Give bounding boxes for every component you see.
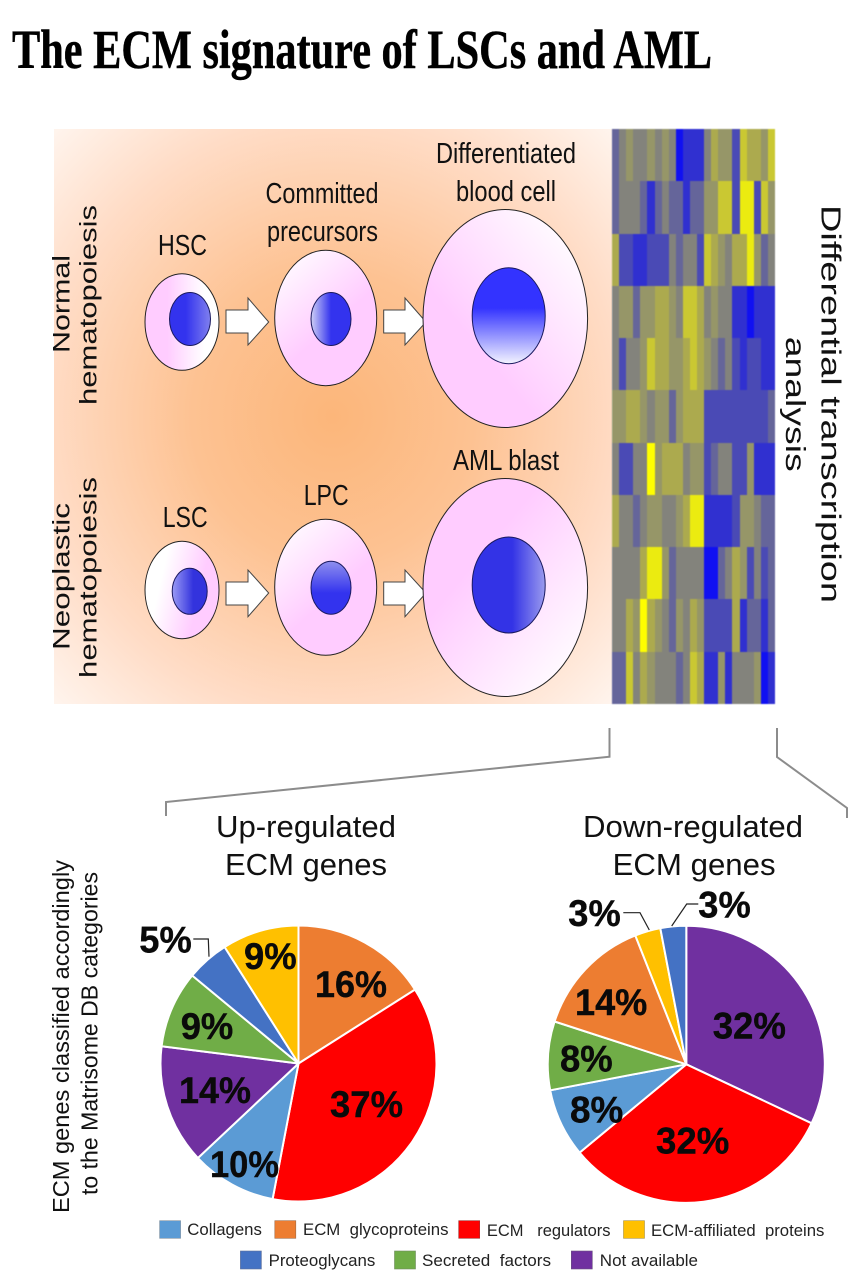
arrow: precursors to differentiated cell xyxy=(384,298,426,345)
label: LPC: LPC xyxy=(304,480,349,512)
cell: HSC xyxy=(145,274,219,370)
label: Differential transcription analysis xyxy=(780,205,847,603)
pie chart: down-regulated: 14% xyxy=(575,981,647,1023)
label: Committed precursors: precursors xyxy=(267,216,378,248)
pie chart: down-regulated: 8% xyxy=(570,1088,623,1130)
pie chart: up-regulated: 10% xyxy=(210,1143,279,1185)
pie chart: down-regulated: 8% xyxy=(560,1038,613,1080)
heading: Up-regulated ECM genes: ECM genes xyxy=(225,847,387,882)
label: Differential transcription analysis: analysis xyxy=(780,337,811,472)
label: Differentiated blood cell xyxy=(436,138,576,208)
connector: heatmap to down-regulated genes xyxy=(777,728,847,818)
label: Normal hematopoiesis xyxy=(48,205,103,405)
heatmap: differential transcription xyxy=(611,128,776,705)
label: Neoplastic hematopoiesis: hematopoiesis xyxy=(76,477,103,678)
legend: ECM regulators xyxy=(487,1222,610,1240)
arrow: LSC to LPC xyxy=(226,570,269,617)
pie chart: down-regulated: 32% xyxy=(713,1004,786,1046)
label: AML blast: AML blast xyxy=(453,445,559,477)
label: Committed precursors: Committed xyxy=(266,178,378,210)
legend: Secreted factors xyxy=(422,1252,551,1270)
heading: Up-regulated ECM genes: Up-regulated xyxy=(216,809,396,844)
label: Differential transcription analysis: Differential transcription xyxy=(816,205,847,603)
pie chart: up-regulated: 16% xyxy=(315,963,387,1005)
cell: AML blast xyxy=(423,478,588,696)
label: Normal hematopoiesis: Normal xyxy=(48,255,75,353)
pie chart: up-regulated: 9% xyxy=(181,1005,233,1047)
legend: ECM-affiliated proteins xyxy=(651,1222,824,1240)
connector: heatmap to up-regulated genes xyxy=(166,728,610,816)
pie chart: up-regulated: 37% xyxy=(330,1083,403,1125)
label: Committed precursors xyxy=(266,178,378,248)
legend: Collagens xyxy=(187,1221,262,1239)
heading: Up-regulated ECM genes xyxy=(216,809,396,882)
cell: LSC xyxy=(145,541,219,639)
label: Neoplastic hematopoiesis: Neoplastic xyxy=(48,503,75,650)
pie chart: up-regulated: 14% xyxy=(179,1069,251,1111)
label: Differentiated blood cell: blood cell xyxy=(456,176,556,208)
pie chart: up-regulated: 9% xyxy=(244,935,297,977)
pie chart: up-regulated: 5% xyxy=(139,919,192,961)
heading: Down-regulated ECM genes: Down-regulated xyxy=(583,809,803,844)
cell: LPC xyxy=(275,519,377,655)
label: Normal hematopoiesis: hematopoiesis xyxy=(76,205,103,405)
pie chart: down-regulated: 3% xyxy=(568,892,621,934)
arrow: LPC to AML blast xyxy=(384,570,426,617)
legend: Proteoglycans xyxy=(269,1252,375,1270)
label: HSC: HSC xyxy=(158,230,207,262)
label: ECM genes classification axis xyxy=(48,860,102,1213)
label: Neoplastic hematopoiesis xyxy=(48,477,103,678)
label: LSC: LSC xyxy=(163,502,208,534)
cell: differentiated blood cell xyxy=(423,210,588,428)
pie chart: down-regulated: 3% xyxy=(698,883,751,925)
heading: Down-regulated ECM genes xyxy=(583,809,803,882)
arrow: HSC to committed precursors xyxy=(226,298,269,345)
pie chart: down-regulated: 32% xyxy=(656,1119,729,1161)
label: ECM genes classification axis: to the Matrisome DB categories xyxy=(76,872,102,1195)
legend: Not available xyxy=(600,1252,698,1270)
cell: committed precursor xyxy=(275,250,377,386)
heading: Down-regulated ECM genes: ECM genes xyxy=(613,847,776,882)
label: Differentiated blood cell: Differentiated xyxy=(436,138,576,170)
pie chart: up-regulated xyxy=(139,919,436,1202)
label: ECM genes classification axis: ECM genes classified accordingly xyxy=(48,860,74,1213)
panel: hematopoiesis background xyxy=(54,129,612,704)
legend: ECM glycoproteins xyxy=(303,1221,448,1239)
pie chart: down-regulated xyxy=(548,883,825,1203)
legend xyxy=(160,1221,824,1270)
